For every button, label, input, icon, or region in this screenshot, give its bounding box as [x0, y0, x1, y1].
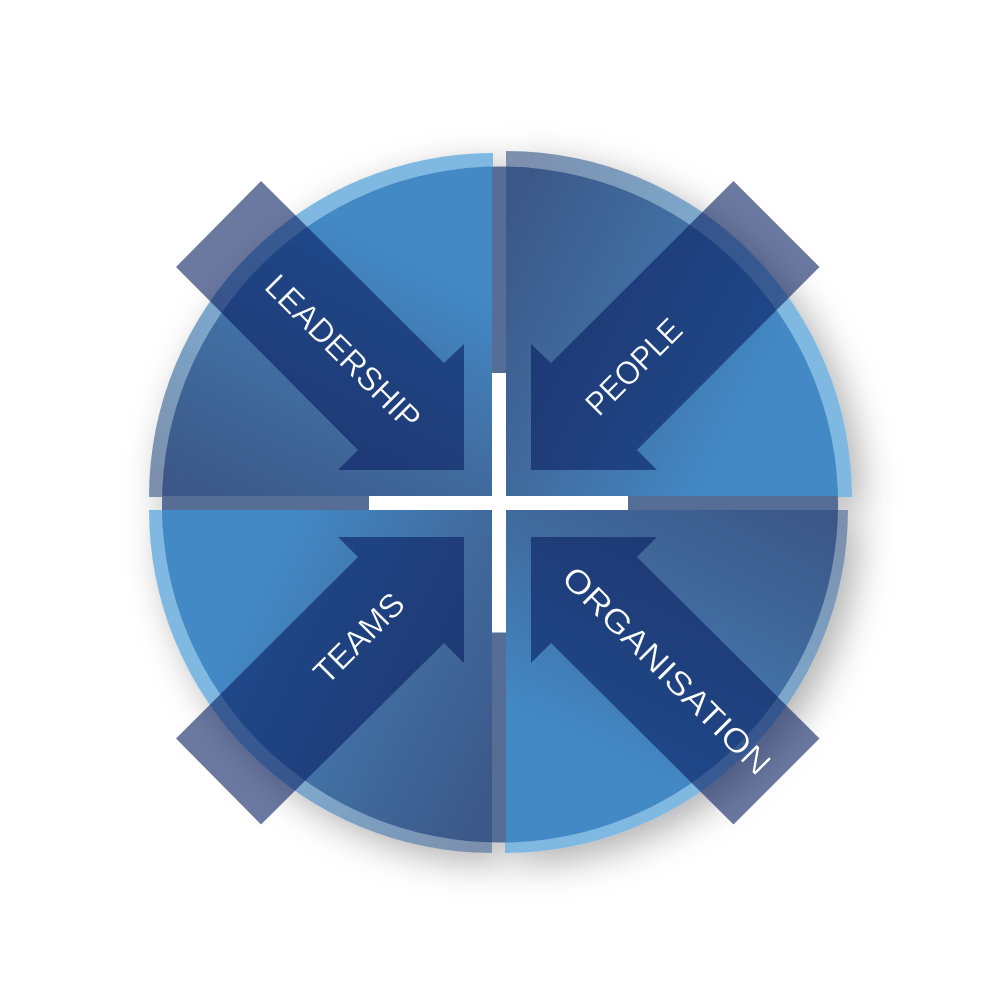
infographic: four arrows converging on a central cross — [141, 142, 882, 883]
central white cross — [369, 373, 628, 632]
label: organisation: ORGANISATION — [555, 559, 778, 782]
outer ring: four offset quadrants with drop shadow — [149, 151, 852, 853]
inner disc: base showing through the cross-shaped gaps — [162, 166, 838, 842]
arrow: leadership — [176, 181, 464, 470]
label: teams: TEAMS — [306, 585, 412, 691]
label: people: PEOPLE — [578, 311, 690, 422]
arrow: teams — [176, 537, 464, 824]
inner quadrants with gradients — [150, 150, 856, 856]
arrow: people — [531, 181, 820, 470]
label: leadership: LEADERSHIP — [258, 267, 428, 437]
arrow: organisation — [531, 537, 820, 824]
